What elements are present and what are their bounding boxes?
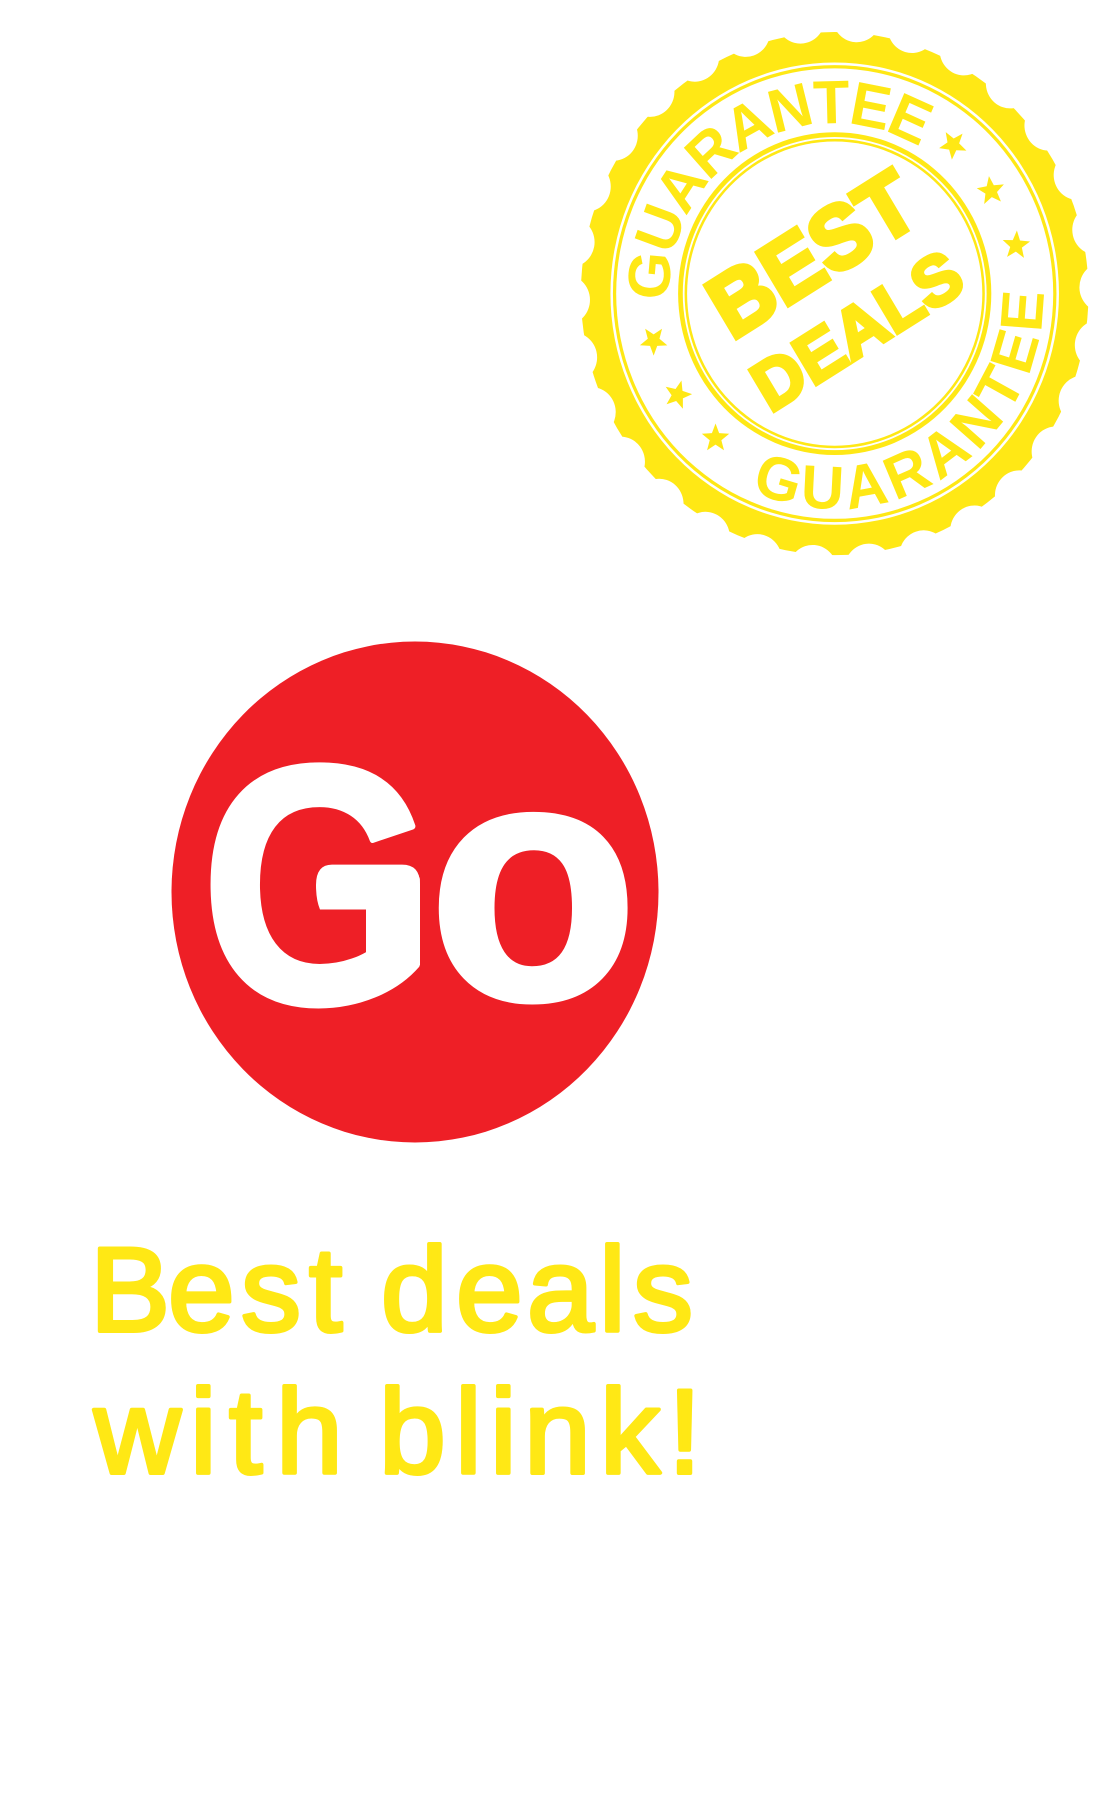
red circle — [172, 642, 658, 1142]
badge: best deals guarantee stamp — [581, 32, 1088, 556]
scalloped seal edge — [541, 0, 1120, 597]
concentric rings — [610, 62, 1059, 525]
headline text — [90, 1223, 701, 1499]
centre text: best: BEST — [691, 151, 933, 357]
centre text: deals: DEALS — [738, 235, 976, 426]
logo g crossbar thickening — [316, 865, 420, 965]
stars — [634, 125, 1031, 450]
headline line 2: with blink! — [93, 1365, 701, 1499]
logo letter o: o — [429, 691, 638, 1071]
logo: red go circle — [172, 642, 658, 1142]
logo g inner notch — [316, 910, 366, 922]
headline line 1: Best deals — [90, 1223, 693, 1357]
logo letter g: G — [201, 696, 436, 1074]
curved text: bottom guarantee: GUARANTEE — [758, 292, 1044, 510]
curved text: top guarantee: GUARANTEE — [628, 80, 934, 297]
